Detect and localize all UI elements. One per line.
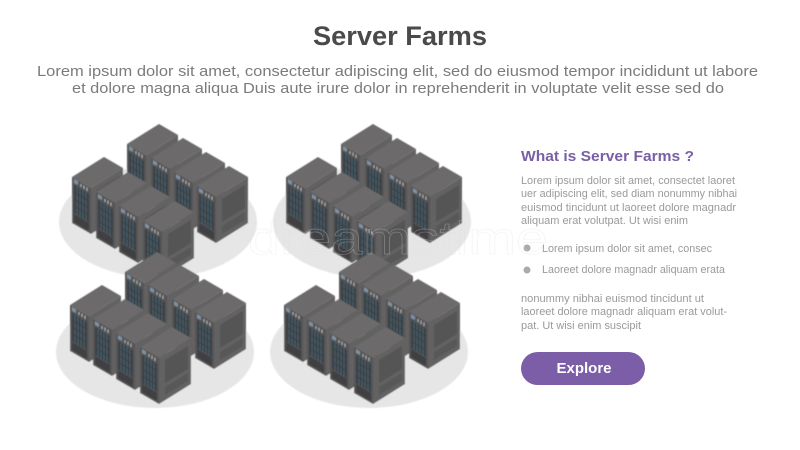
intro paragraph xyxy=(521,175,737,227)
subtitle xyxy=(37,63,758,97)
intro paragraph: Lorem ipsum dolor sit amet, consectet laoret xyxy=(521,175,735,187)
side panel heading: What is Server Farms ? xyxy=(521,148,694,165)
explore button: Explore xyxy=(556,360,612,377)
closing paragraph xyxy=(521,293,727,332)
intro paragraph: euismod tincidunt ut laoreet dolore magnadr xyxy=(521,202,736,214)
subtitle: Lorem ipsum dolor sit amet, consectetur adipiscing elit, sed do eiusmod tempor incididunt ut labore xyxy=(37,63,758,80)
closing paragraph: laoreet dolore magnadr aliquam erat volut- xyxy=(521,306,727,318)
server cluster: top right xyxy=(273,124,471,278)
closing paragraph: nonummy nibhai euismod tincidunt ut xyxy=(521,293,704,305)
server cluster: bottom right xyxy=(270,252,468,408)
bullet list: Laoreet dolore magnadr aliquam erata xyxy=(542,264,726,276)
subtitle: et dolore magna aliqua Duis aute irure dolor in reprehenderit in voluptate velit esse sed do xyxy=(72,80,724,97)
intro paragraph: aliquam erat volutpat. Ut wisi enim xyxy=(521,215,688,227)
server cluster: bottom left xyxy=(56,252,254,408)
title: Server Farms xyxy=(313,21,487,51)
explore button xyxy=(521,352,645,385)
watermark: dreamstime xyxy=(248,212,548,264)
server cluster: top left xyxy=(59,124,257,278)
bullet list: Lorem ipsum dolor sit amet, consec xyxy=(542,243,712,255)
intro paragraph: uer adipiscing elit, sed diam nonummy nibhai xyxy=(521,188,737,200)
bullet list xyxy=(524,243,726,276)
closing paragraph: pat. Ut wisi enim suscipit xyxy=(521,320,641,332)
